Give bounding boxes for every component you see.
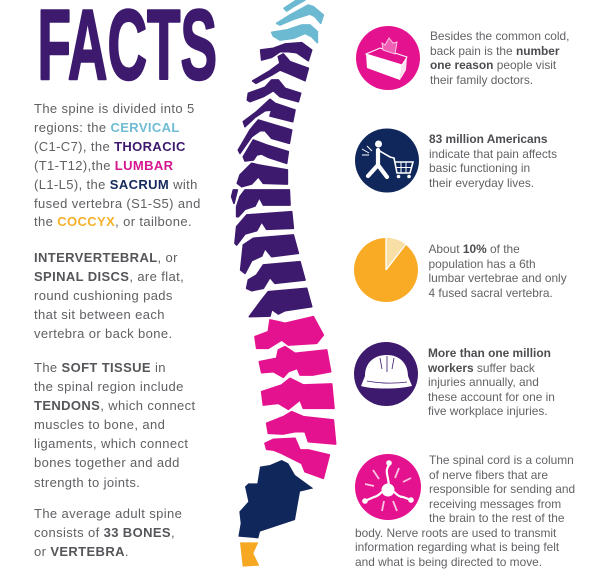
- fact: 83 million Americans: 83 million Americans: [429, 132, 548, 146]
- fact: 10 percent: [428, 242, 567, 300]
- text block: soft tissue: bones together and add: [34, 455, 180, 470]
- cervical vertebrae: [272, 0, 323, 43]
- icon: person pulling shopping cart: [355, 128, 419, 192]
- text block: spine regions: The spine is divided into 5: [34, 101, 195, 116]
- text block: spinal discs: round cushioning pads: [34, 288, 173, 303]
- fact: spinal cord: information regarding what is being felt: [355, 540, 559, 554]
- fact: workplace injuries: injuries annually, and: [428, 375, 539, 389]
- fact: spinal cord: responsible for sending and: [429, 482, 575, 496]
- fact: workplace injuries: five workplace injuries.: [428, 404, 548, 418]
- fact: spinal cord: [355, 453, 575, 568]
- fact: 83 million Americans: indicate that pain affects: [429, 146, 557, 160]
- text block: adult spine: [34, 506, 182, 559]
- spine illustration: [232, 0, 336, 567]
- fact: 83 million Americans: [429, 132, 557, 190]
- fact: spinal cord: body. Nerve roots are used to transmit: [355, 526, 556, 540]
- text block: spinal discs: [34, 250, 184, 341]
- icon: pie chart 10%: [354, 238, 418, 302]
- fact: 83 million Americans: their everyday lives.: [429, 176, 534, 190]
- fact: spinal cord: the brain to the rest of the: [429, 511, 565, 525]
- icon: tissue box: [356, 26, 420, 90]
- text block: adult spine: The average adult spine: [34, 506, 182, 521]
- fact: workplace injuries: these account for one in: [428, 390, 555, 404]
- text block: soft tissue: The SOFT TISSUE in: [34, 360, 166, 375]
- lumbar vertebrae: [255, 317, 336, 478]
- icon: hard hat: [354, 342, 418, 406]
- fact: spinal cord: of nerve fibers that are: [429, 468, 548, 482]
- text block: soft tissue: strength to joints.: [34, 475, 140, 490]
- text block: spinal discs: vertebra or back bone.: [34, 326, 172, 341]
- text block: spine regions: [34, 101, 201, 229]
- text block: spine regions: (C1-C7), the THORACIC: [34, 139, 186, 154]
- fact: back pain: [430, 29, 569, 86]
- text block: soft tissue: [34, 360, 196, 490]
- text block: spine regions: (T1-T12),the LUMBAR: [34, 158, 173, 173]
- fact: back pain: back pain is the number: [430, 44, 560, 58]
- fact: 10 percent: About 10% of the: [428, 242, 520, 256]
- fact: back pain: Besides the common cold,: [430, 29, 569, 43]
- fact: spinal cord: and what is being directed to move.: [355, 554, 542, 568]
- text block: spine regions: fused vertebra (S1-S5) and: [34, 196, 201, 211]
- fact: 83 million Americans: basic functioning in: [429, 161, 530, 175]
- text block: spinal discs: INTERVERTEBRAL, or: [34, 250, 178, 265]
- fact: workplace injuries: workers suffer back: [428, 360, 535, 374]
- fact: back pain: one reason people visit: [430, 58, 556, 72]
- coccyx: [240, 542, 259, 567]
- fact: 10 percent: lumbar vertebrae and only: [428, 271, 567, 285]
- fact: workplace injuries: [428, 346, 555, 418]
- text block: spinal discs: that sit between each: [34, 307, 165, 322]
- fact: spinal cord: The spinal cord is a column: [429, 453, 574, 467]
- text block: spine regions: the COCCYX, or tailbone.: [34, 214, 192, 229]
- text block: soft tissue: TENDONS, which connect: [34, 398, 196, 413]
- text block: soft tissue: the spinal region include: [34, 379, 184, 394]
- text block: adult spine: or VERTEBRA.: [34, 544, 129, 559]
- text block: spine regions: regions: the CERVICAL: [34, 120, 180, 135]
- text block: soft tissue: muscles to bone, and: [34, 417, 165, 432]
- thoracic vertebrae: [232, 43, 312, 317]
- sacrum: [238, 460, 313, 538]
- text block: spinal discs: SPINAL DISCS, are flat,: [34, 269, 184, 284]
- fact: 10 percent: 4 fused sacral vertebra.: [428, 286, 553, 300]
- text block: spine regions: (L1-L5), the SACRUM with: [34, 177, 198, 192]
- icon: spinal nerve: [355, 454, 421, 520]
- text block: adult spine: consists of 33 BONES,: [34, 525, 175, 540]
- fact: workplace injuries: More than one million: [428, 346, 551, 360]
- text block: soft tissue: ligaments, which connect: [34, 436, 188, 451]
- fact: 10 percent: population has a 6th: [428, 256, 536, 270]
- fact: back pain: their family doctors.: [430, 72, 533, 86]
- fact: spinal cord: receiving messages from: [429, 496, 561, 510]
